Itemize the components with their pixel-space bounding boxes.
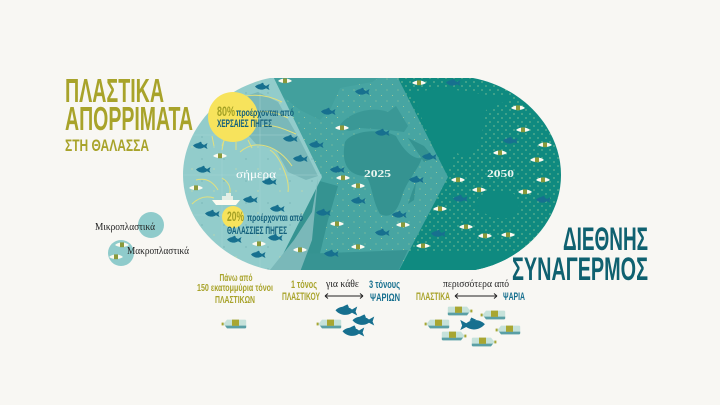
circle: 20% highlight <box>222 206 244 228</box>
text: 3 tonnes fish <box>369 279 400 304</box>
arrow: 2025 ratio <box>325 294 363 298</box>
panel: today section <box>183 78 322 270</box>
heading: global alarm <box>512 221 648 287</box>
label: 2050: 2050 <box>487 169 514 180</box>
label: fish: ΨΑΡΙΑ <box>503 291 525 303</box>
stat: 20% sea sources: προέρχονται από <box>247 212 303 224</box>
icon: bottle 2025 <box>317 320 341 328</box>
arrow: 2050 ratio <box>455 294 497 298</box>
legend: microplastics <box>95 212 164 238</box>
text: 150 million tonnes: Πάνω από <box>220 272 252 284</box>
stat: 80% land sources: προέρχονται από <box>236 107 294 119</box>
icon: bottle today <box>222 320 246 328</box>
icons: 2050 bottles and fish <box>425 307 520 346</box>
panel: 2025 section <box>274 78 448 270</box>
text: 3 tonnes fish: ΨΑΡΙΩΝ <box>370 292 400 304</box>
text: 150 million tonnes: 150 εκατομμύρια τόνοι <box>197 282 273 294</box>
title: marine plastic litter: ΑΠΟΡΡΙΜΑΤΑ <box>65 100 193 137</box>
world map panel <box>183 78 561 270</box>
text: 3 tonnes fish: 3 τόνους <box>369 279 400 291</box>
title: marine plastic litter: ΣΤΗ ΘΑΛΑΣΣΑ <box>65 136 149 155</box>
icons: three fish <box>336 304 374 336</box>
heading: global alarm: ΔΙΕΘΝΗΣ <box>563 221 648 257</box>
icons: floating plastic across map <box>189 78 552 252</box>
text: more than: περισσότερα από <box>443 279 509 290</box>
text: 1 tonne plastic: ΠΛΑΣΤΙΚΟΥ <box>282 291 320 303</box>
stat: 80% land sources: ΧΕΡΣΑΙΕΣ ΠΗΓΕΣ <box>217 118 272 130</box>
label: today: σήμερα <box>236 169 276 181</box>
legend: macroplastics: Μακροπλαστικά <box>127 246 190 257</box>
title: marine plastic litter: ΠΛΑΣΤΙΚΑ <box>65 72 164 109</box>
legend: macroplastics <box>108 240 190 266</box>
stat: 20% sea sources: 20% <box>227 208 244 224</box>
text: 150 million tonnes <box>197 272 273 306</box>
text: 1 tonne plastic <box>282 279 320 303</box>
arcs: plastic flows <box>192 95 296 204</box>
title: marine plastic litter <box>65 72 193 155</box>
icons: fish across map <box>193 79 550 258</box>
legend: microplastics: Μικροπλαστικά <box>95 222 156 233</box>
text: 150 million tonnes: ΠΛΑΣΤΙΚΩΝ <box>215 294 255 306</box>
circle: 80% highlight <box>208 92 258 142</box>
stat: 20% sea sources <box>227 208 303 237</box>
icon: ship <box>212 193 240 205</box>
stat: 20% sea sources: ΘΑΛΑΣΣΙΕΣ ΠΗΓΕΣ <box>227 225 287 237</box>
text: 1 tonne plastic: 1 τόνος <box>291 279 317 291</box>
stat: 80% land sources: 80% <box>217 103 235 119</box>
label: 2025: 2025 <box>364 169 391 180</box>
label: plastics: ΠΛΑΣΤΙΚΑ <box>416 291 450 303</box>
panel: 2050 section <box>398 78 561 270</box>
text: for every: για κάθε <box>325 279 359 290</box>
stat: 80% land sources <box>217 103 294 130</box>
